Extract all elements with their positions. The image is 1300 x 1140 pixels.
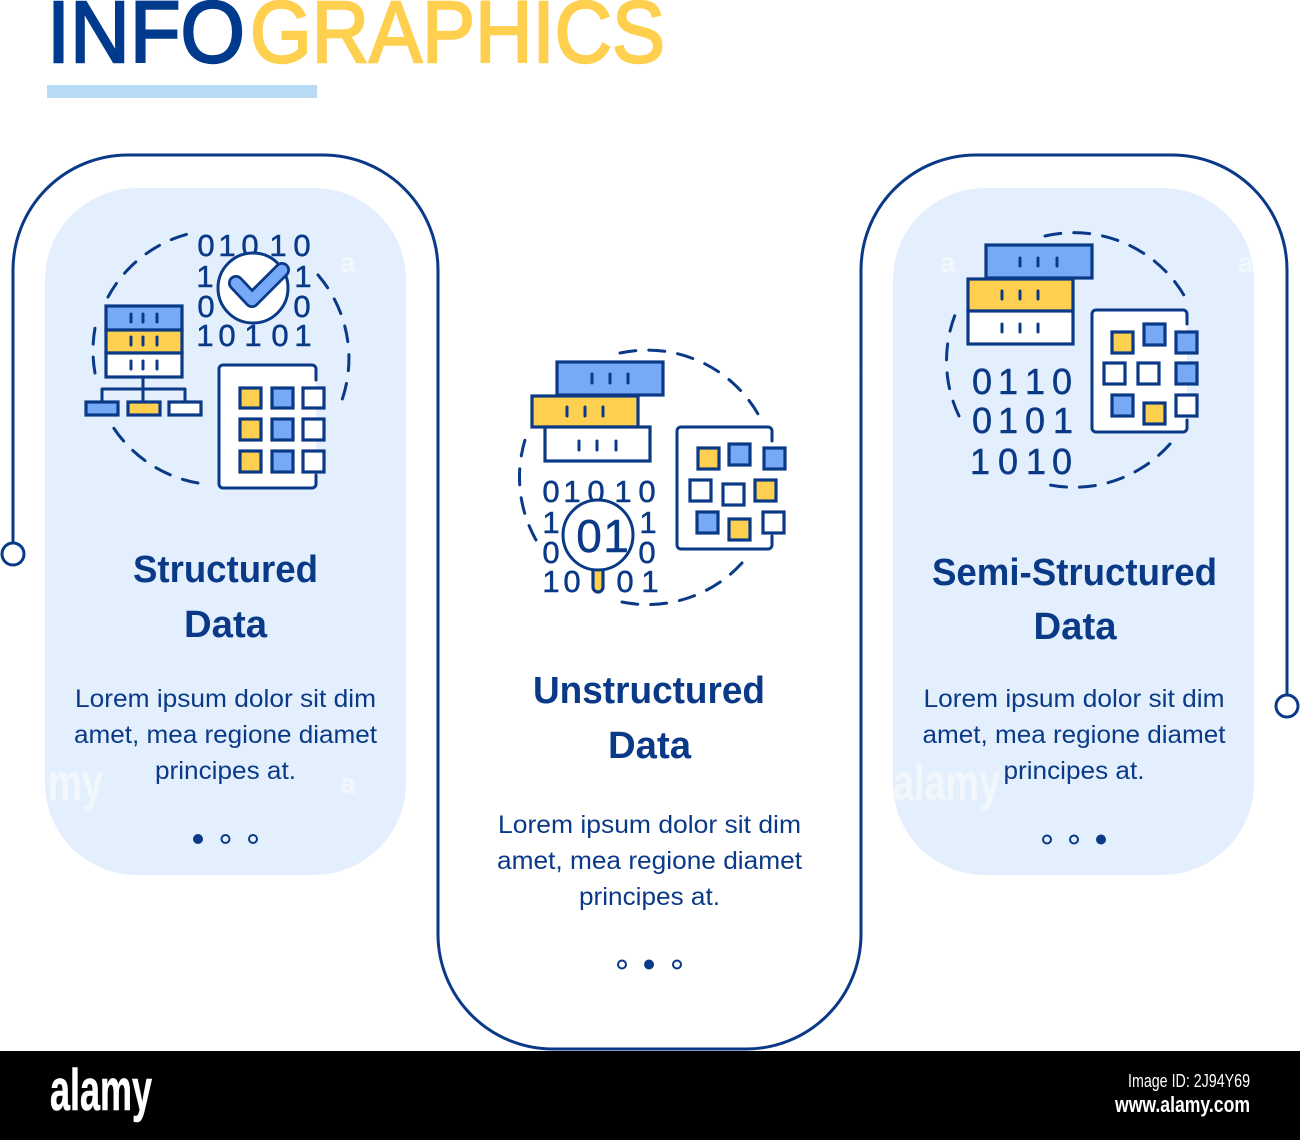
body text: semi-structured data: Lorem ipsum dolor sit dim: [924, 685, 1224, 713]
icon: structured data: 10101: [196, 318, 312, 353]
title: [47, 0, 665, 81]
heading: unstructured data: [533, 670, 765, 767]
footer image id and url: www.alamy.com: [1114, 1092, 1250, 1117]
body text: structured data: Lorem ipsum dolor sit dim: [75, 685, 376, 713]
icon: unstructured data: 1001: [542, 564, 659, 599]
heading: unstructured data: Unstructured: [533, 670, 765, 712]
icon: structured data: 11: [196, 259, 312, 294]
icon: unstructured data: 01: [576, 510, 629, 562]
stock watermark remnants: a: [340, 247, 356, 278]
panel: semi-structured data: [922, 233, 1226, 844]
heading: structured data: Structured: [133, 549, 318, 591]
body text: structured data: principes at.: [155, 757, 296, 785]
pagination dots: second active: [618, 960, 681, 970]
heading: semi-structured data: Data: [1034, 606, 1117, 648]
body text: unstructured data: amet, mea regione diamet: [497, 847, 802, 875]
icon: structured data: 00: [197, 289, 311, 324]
footer logo: alamy: [50, 1058, 152, 1123]
panel: unstructured data: [497, 350, 802, 969]
icon: unstructured data: 01010: [542, 474, 656, 509]
heading: unstructured data: Data: [608, 725, 692, 767]
stock watermark remnants: a: [340, 768, 356, 799]
body text: unstructured data: principes at.: [579, 883, 720, 911]
heading: structured data: Data: [184, 604, 268, 646]
pagination dots: first active: [193, 834, 257, 844]
icon: unstructured data: 11: [542, 505, 657, 540]
body text: semi-structured data: principes at.: [1004, 757, 1144, 785]
panel background: structured data: [45, 188, 406, 875]
stock watermark remnants: a: [940, 247, 956, 278]
heading: semi-structured data: Semi-Structured: [932, 552, 1217, 594]
stock watermark remnants: alamy: [893, 754, 1000, 812]
icon: semi-structured data: 0101: [972, 400, 1073, 441]
icon: structured data: 01010: [197, 228, 311, 263]
outline end node: [1276, 695, 1298, 717]
body text: unstructured data: Lorem ipsum dolor sit dim: [498, 811, 801, 839]
icon: semi-structured data: 1010: [970, 441, 1072, 482]
body text: structured data: amet, mea regione diamet: [74, 721, 377, 749]
heading: structured data: [133, 549, 318, 646]
continuous panel outline: [13, 155, 1287, 1049]
heading: semi-structured data: [932, 552, 1217, 648]
panel: structured data: [74, 228, 377, 844]
stock watermark remnants: a: [1238, 247, 1254, 278]
icon: structured data: [86, 228, 349, 488]
stock watermark remnants: [48, 247, 1254, 812]
body text: unstructured data: [497, 811, 802, 911]
footer image id and url: [1114, 1071, 1250, 1117]
icon: unstructured data: 00: [542, 535, 656, 570]
footer bar: [0, 1051, 1300, 1140]
footer image id and url: Image ID: 2J94Y69: [1128, 1071, 1250, 1091]
icon: semi-structured data: 0110: [972, 361, 1072, 402]
panel background: semi-structured data: [893, 188, 1254, 875]
outline start node: [2, 543, 24, 565]
icon: unstructured data: [519, 350, 785, 605]
title underline bar: [47, 85, 317, 98]
body text: semi-structured data: amet, mea regione diamet: [922, 721, 1226, 749]
body text: semi-structured data: [922, 685, 1226, 785]
pagination dots: third active: [1043, 834, 1106, 844]
body text: structured data: [74, 685, 377, 785]
icon: semi-structured data: [947, 233, 1197, 487]
stock watermark remnants: my: [48, 754, 103, 812]
